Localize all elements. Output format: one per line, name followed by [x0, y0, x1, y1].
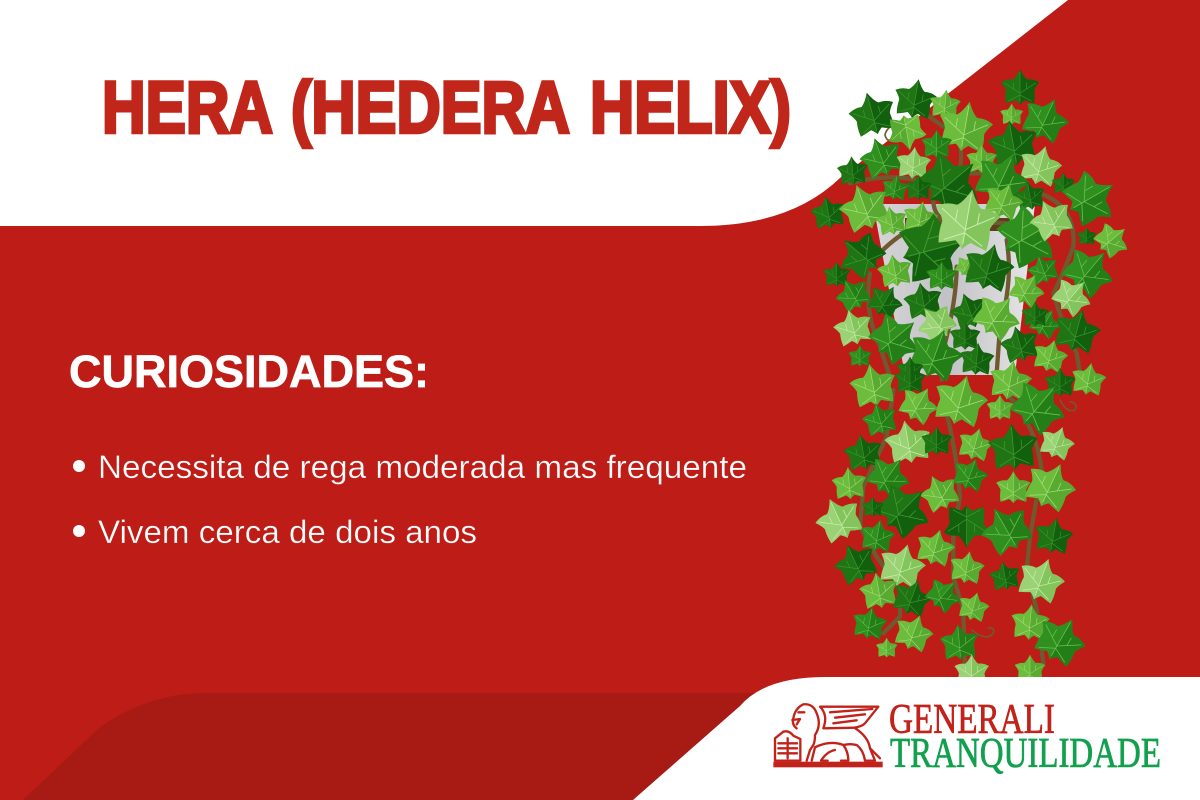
plant pot — [873, 204, 1035, 375]
heading: curiosidades: CURIOSIDADES: — [69, 346, 429, 397]
ivy upper part — [808, 69, 1136, 386]
soil — [905, 218, 1010, 231]
ivy hanging vines — [809, 357, 1108, 686]
title: (HEDERA — [291, 68, 570, 148]
bullet 1: Necessita de rega moderada mas frequente — [98, 449, 747, 485]
title: HELIX) — [590, 68, 791, 148]
white logo panel — [633, 677, 1200, 800]
logo wordmark — [889, 697, 1161, 777]
logo wordmark: GENERALI — [889, 697, 1055, 743]
title: HERA — [102, 68, 273, 148]
bullet 2: Vivem cerca de dois anos — [98, 514, 477, 550]
logo: generali tranquilidade — [773, 697, 1161, 777]
illustration: hanging ivy in a white pot — [808, 69, 1136, 686]
logo emblem: winged lion with book — [773, 704, 883, 767]
title — [102, 68, 791, 148]
white top banner — [0, 0, 1068, 226]
dark red bottom band — [23, 693, 800, 800]
bullet list — [73, 449, 747, 550]
